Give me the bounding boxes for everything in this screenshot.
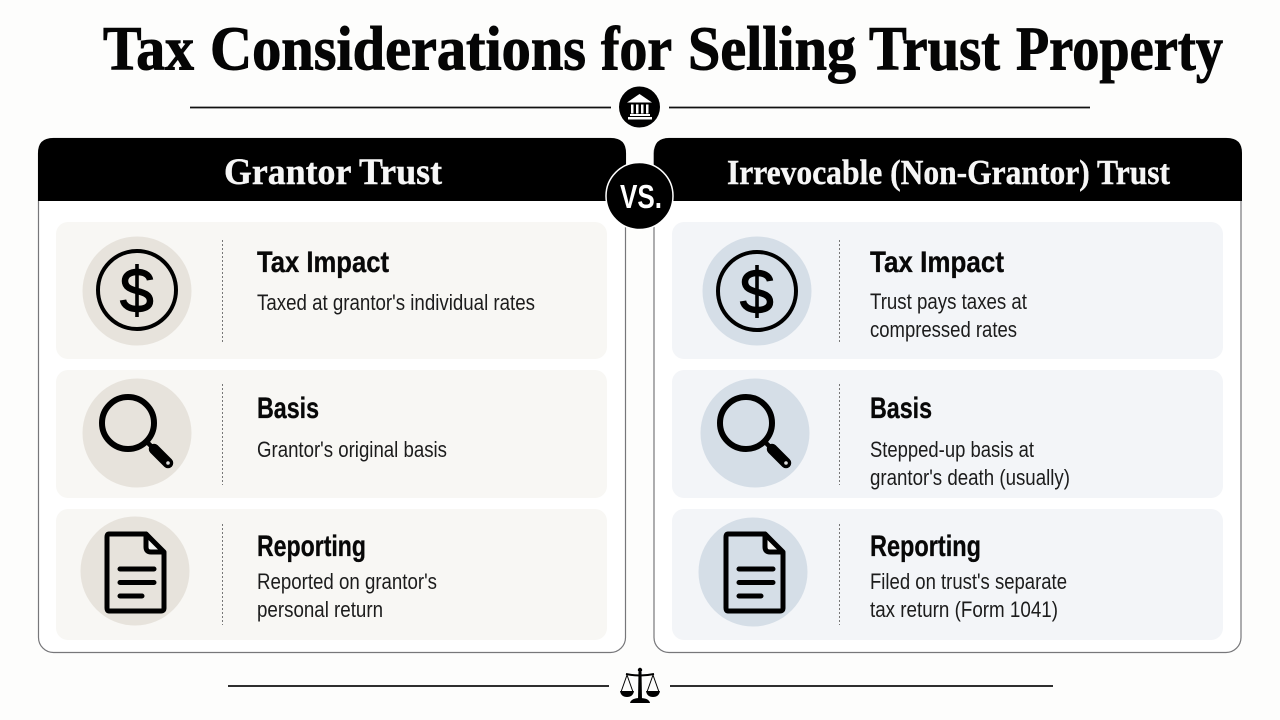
row: tax impact: Tax Impact: [257, 246, 389, 279]
title: Property: [1016, 16, 1223, 84]
row: reporting: Reported on grantor's: [257, 569, 437, 594]
row: reporting: personal return: [257, 597, 383, 622]
title: Selling: [688, 16, 856, 84]
title: Considerations: [210, 16, 586, 84]
row: tax impact: Tax Impact: [870, 246, 1004, 279]
row: reporting: [672, 509, 1223, 640]
row: tax impact: compressed rates: [870, 317, 1017, 342]
row: basis: [56, 370, 607, 498]
row: basis: grantor's death (usually): [870, 465, 1070, 490]
row: tax impact: Taxed at grantor's individual rates: [257, 290, 535, 315]
panel: irrevocable trust: [654, 138, 1242, 652]
row: tax impact: Trust pays taxes at: [870, 289, 1027, 314]
row: basis: Grantor's original basis: [257, 437, 447, 462]
row: reporting: Reporting: [870, 530, 981, 563]
row: tax impact: [56, 222, 607, 359]
row: tax impact: [672, 222, 1223, 359]
header: irrevocable trust: [654, 138, 1242, 201]
row: basis: Basis: [870, 392, 932, 425]
vs badge: VS.: [620, 178, 662, 215]
title: Trust: [869, 16, 1000, 84]
row: reporting: [56, 509, 607, 640]
row: basis: Stepped-up basis at: [870, 437, 1034, 462]
icon: scales of justice: [620, 668, 660, 703]
title: for: [601, 16, 672, 84]
panel: grantor trust: [38, 138, 626, 652]
title: Tax: [103, 16, 194, 84]
vs badge: [606, 162, 673, 230]
row: reporting: Filed on trust's separate: [870, 569, 1067, 594]
header: grantor trust: [38, 138, 626, 201]
header: grantor trust: Grantor Trust: [224, 152, 443, 193]
row: reporting: Reporting: [257, 530, 366, 563]
icon: courthouse: [619, 86, 660, 128]
title: [103, 16, 1223, 84]
row: basis: Basis: [257, 392, 319, 425]
row: basis: [672, 370, 1223, 498]
header: irrevocable trust: Irrevocable (Non-Grantor) Trust: [727, 153, 1170, 192]
row: reporting: tax return (Form 1041): [870, 597, 1058, 622]
